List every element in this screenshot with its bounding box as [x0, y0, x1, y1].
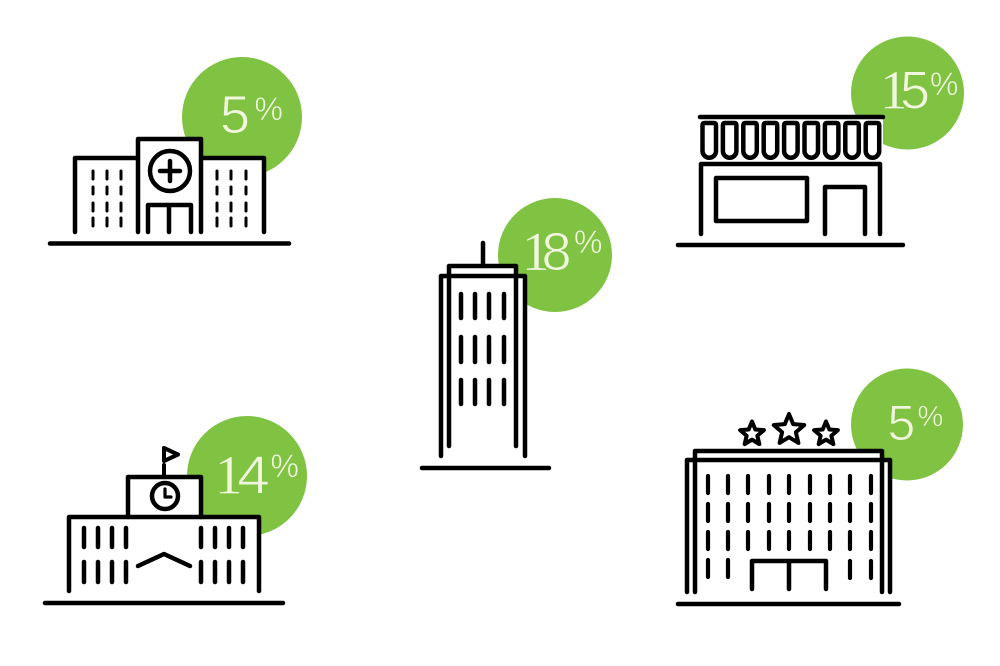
store ground line — [678, 243, 903, 247]
tower percentage badge — [498, 198, 612, 312]
school percentage badge: 1 — [215, 444, 242, 506]
store percentage badge: % — [930, 66, 958, 102]
store group — [678, 36, 964, 245]
store percentage badge: 5 — [900, 60, 930, 120]
icon: school building — [69, 448, 259, 591]
hospital percentage badge: 5 — [220, 85, 250, 145]
tower percentage badge: % — [574, 224, 602, 260]
school ground line — [45, 601, 283, 605]
hotel percentage badge — [851, 368, 963, 480]
icon: store building — [700, 117, 883, 234]
office tower group — [422, 198, 612, 468]
icon: office tower — [441, 243, 525, 456]
school group — [45, 416, 307, 603]
hotel ground line — [678, 602, 899, 606]
icon: hotel building — [687, 414, 890, 592]
hotel group — [678, 368, 963, 604]
tower percentage badge: 8 — [542, 222, 572, 282]
hospital percentage badge — [182, 57, 302, 177]
school percentage badge: 4 — [237, 446, 270, 506]
hospital percentage badge: % — [254, 91, 283, 127]
tower percentage badge: 1 — [522, 221, 550, 282]
hospital ground line — [50, 241, 289, 246]
hospital group — [50, 57, 302, 244]
school percentage badge: % — [270, 448, 299, 484]
icon: hospital building — [75, 139, 264, 232]
hotel percentage badge: % — [918, 401, 943, 433]
hotel percentage badge: 5 — [888, 395, 915, 451]
store percentage badge: 1 — [880, 60, 908, 120]
store percentage badge — [851, 36, 964, 150]
school percentage badge — [187, 416, 307, 536]
tower ground line — [422, 466, 549, 470]
